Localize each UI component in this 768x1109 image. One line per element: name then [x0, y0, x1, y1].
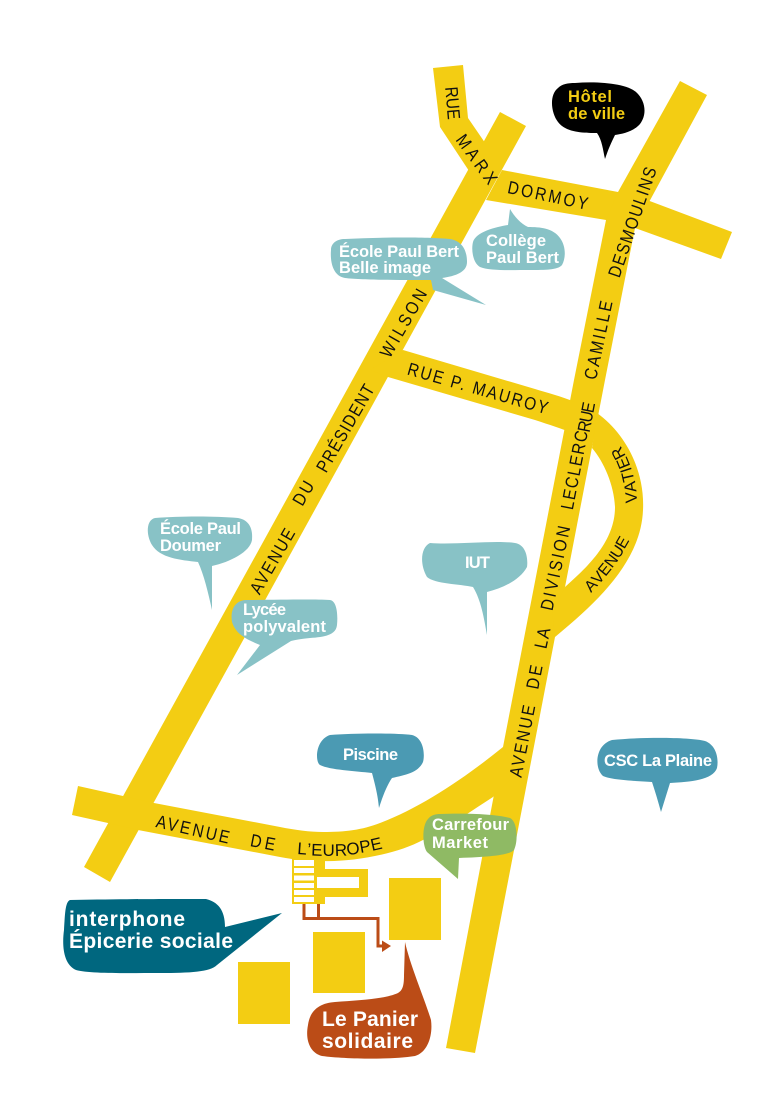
callout: Collège Paul Bert: Collège	[486, 232, 546, 250]
callout: Lycée polyvalent: Lycée	[243, 601, 286, 619]
label: RUE P. MAUROY: RUE P. MAUROY	[405, 359, 550, 418]
callout: École Paul Doumer	[148, 516, 252, 610]
building 1	[389, 878, 441, 940]
road: rue Dormoy	[486, 170, 732, 259]
callout: École Paul Doumer: École Paul	[160, 519, 241, 538]
label: DIVISION: DIVISION	[537, 524, 574, 612]
label: MARX: MARX	[452, 130, 501, 188]
label: LECLERC: LECLERC	[557, 429, 592, 511]
street names	[154, 86, 661, 860]
callout: École Paul Bert Belle image: Belle image	[339, 259, 431, 277]
building 3	[238, 962, 290, 1024]
label: DE (Europe): DE	[249, 830, 277, 855]
callout: École Paul Bert Belle image	[331, 238, 486, 305]
callout: Hôtel de ville	[552, 82, 645, 159]
label: RUE (Marx): RUE	[441, 86, 464, 120]
callout: Le Panier solidaire: solidaire	[322, 1030, 413, 1053]
label: AVENUE (Europe): AVENUE	[154, 811, 232, 848]
arrow: route to Le Panier solidaire	[304, 904, 391, 952]
callout: Collège Paul Bert	[472, 209, 565, 270]
callout: École Paul Bert Belle image: École Paul Bert	[339, 242, 460, 261]
label: AVENUE (Wilson): AVENUE	[246, 525, 299, 598]
callout: interphone Épicerie sociale	[63, 899, 282, 973]
label: L'EUROPE: L’EUROPE	[297, 834, 384, 860]
road: avenue de l'Europe	[72, 747, 515, 861]
callout: Piscine: Piscine	[343, 746, 398, 764]
callout: École Paul Doumer: Doumer	[160, 537, 222, 555]
block of buildings	[238, 856, 441, 1024]
label: DESMOULINS: DESMOULINS	[604, 164, 661, 280]
label: AVENUE (Division): AVENUE	[506, 703, 540, 779]
label: AVENUE (Vatier): AVENUE	[581, 534, 633, 596]
road: rue P. Mauroy	[370, 350, 575, 434]
callout: Le Panier solidaire	[307, 942, 431, 1059]
callout: IUT	[422, 542, 527, 635]
callout: Carrefour Market: Carrefour	[432, 816, 510, 834]
road: avenue du Président Wilson	[84, 112, 526, 882]
callout: Le Panier solidaire: Le Panier	[322, 1008, 418, 1031]
road network	[72, 65, 732, 1053]
building 2	[313, 932, 365, 993]
label: DORMOY: DORMOY	[506, 177, 590, 214]
callout: Hôtel de ville: de ville	[568, 105, 625, 123]
label: LA: LA	[530, 625, 555, 650]
road: rue Camille Desmoulins and avenue de la Division Leclerc	[446, 81, 707, 1053]
label: DE (Division): DE	[522, 663, 547, 691]
callout: CSC La Plaine	[597, 738, 718, 812]
label: DU: DU	[288, 477, 319, 509]
callout: interphone Épicerie sociale: Épicerie sociale	[69, 930, 233, 953]
callout: Collège Paul Bert: Paul Bert	[486, 249, 560, 267]
label: VATIER: VATIER	[608, 444, 641, 503]
callout: Carrefour Market: Market	[432, 834, 488, 852]
callout: Lycée polyvalent	[232, 600, 337, 675]
label: PRÉSIDENT: PRÉSIDENT	[312, 381, 379, 476]
label: CAMILLE: CAMILLE	[580, 299, 617, 381]
label: WILSON: WILSON	[376, 285, 431, 361]
road: avenue Vatier	[552, 413, 643, 637]
callout: Carrefour Market	[423, 814, 517, 879]
callout: CSC La Plaine: CSC La Plaine	[604, 752, 712, 770]
callout: IUT: IUT	[465, 554, 490, 572]
road: rue Marx	[433, 65, 492, 180]
callout: Hôtel de ville: Hôtel	[568, 88, 612, 106]
callout: Piscine	[317, 734, 424, 808]
building: Épicerie sociale	[292, 856, 368, 904]
callout: Lycée polyvalent: polyvalent	[243, 618, 326, 636]
label: RUE (Leclerc): RUE	[574, 400, 599, 434]
callout: interphone Épicerie sociale: interphone	[69, 908, 185, 931]
